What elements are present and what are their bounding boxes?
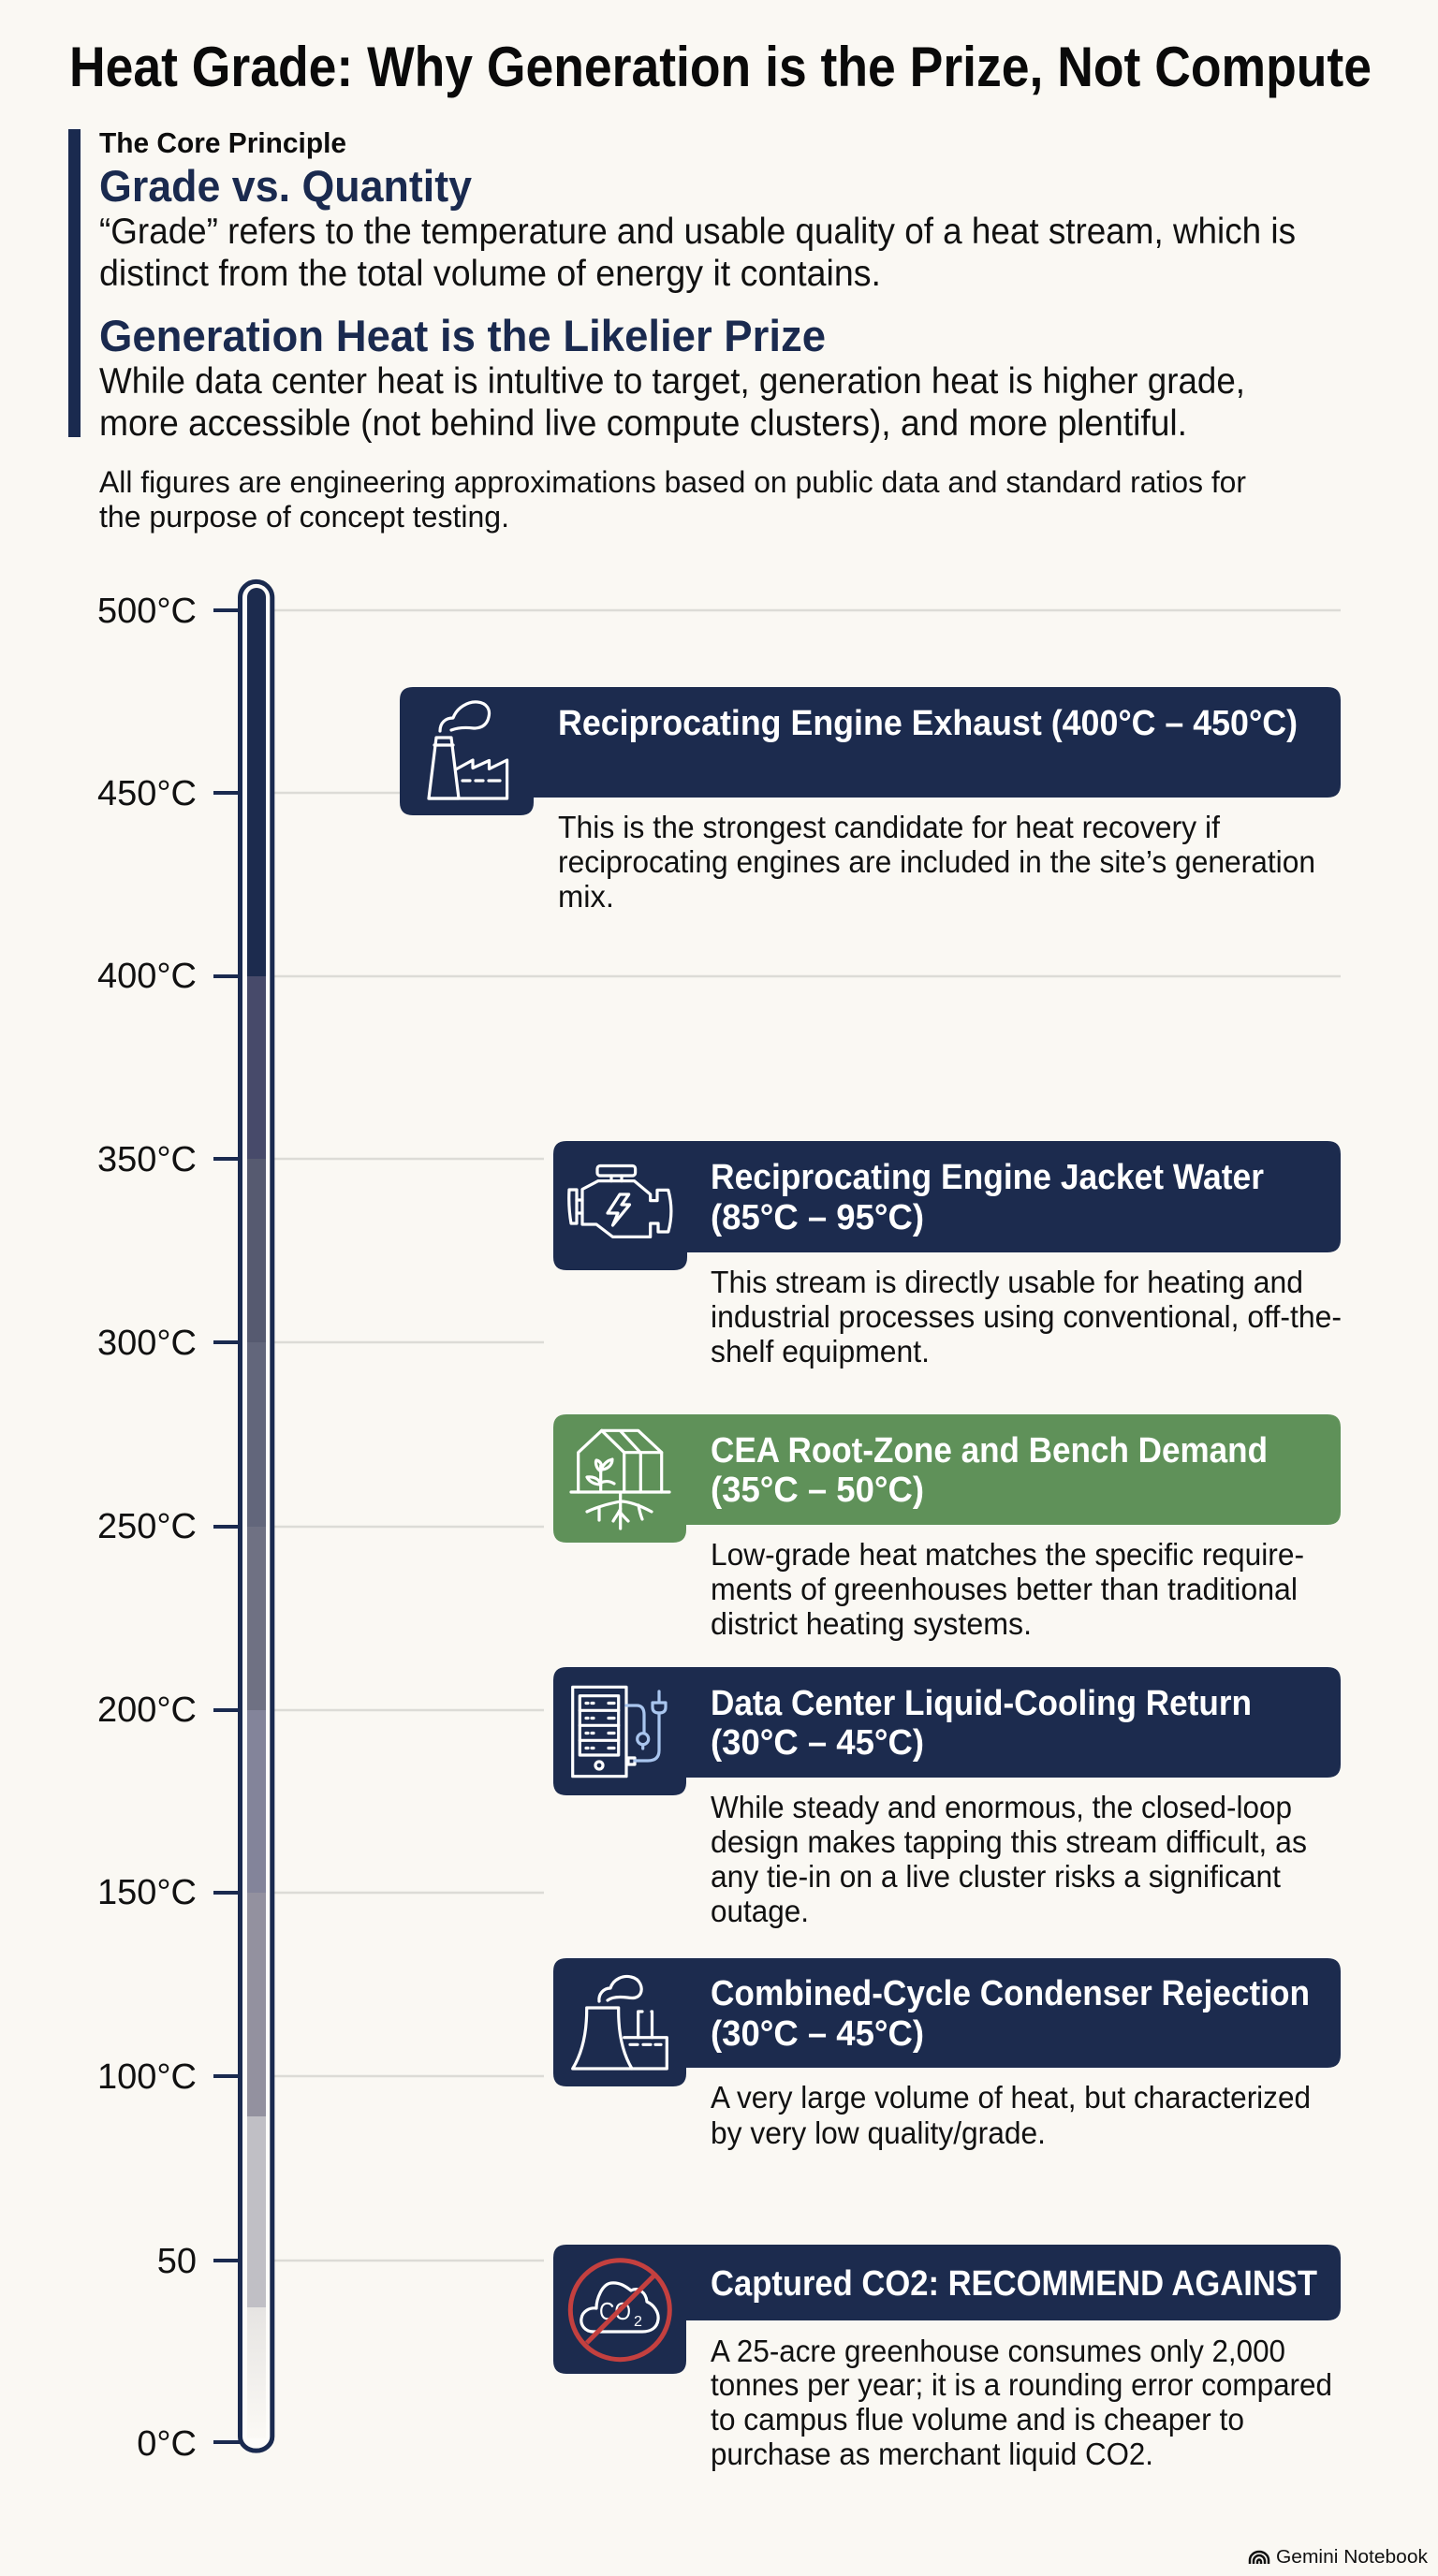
card text xyxy=(711,2334,1332,2471)
card title: Combined-Cycle Condenser Rejection xyxy=(711,1974,1310,2013)
card header xyxy=(553,1958,1341,2086)
text: grade definition: “Grade” refers to the temperature and usable quality of a heat stream, which is xyxy=(99,212,1296,252)
panel: CEA root-zone and bench demand xyxy=(553,1414,1341,1641)
card title: (85°C – 95°C) xyxy=(711,1198,924,1237)
card title xyxy=(711,1974,1310,2054)
axis ticks xyxy=(213,610,240,2442)
axis labels: 100°C xyxy=(97,2057,197,2097)
icon: crossed-out CO2 cloud: CO xyxy=(599,2297,631,2325)
card title: (30°C – 45°C) xyxy=(711,1723,924,1763)
card header xyxy=(553,1141,1341,1270)
text: generation heat explanation xyxy=(99,361,1245,444)
card title xyxy=(711,1684,1252,1763)
card text: Low-grade heat matches the specific require- xyxy=(711,1537,1304,1572)
icon: greenhouse with roots xyxy=(571,1430,669,1529)
text: grade definition: distinct from the total volume of energy it contains. xyxy=(99,254,881,294)
card title: (30°C – 45°C) xyxy=(711,2014,924,2054)
card title: Data Center Liquid-Cooling Return xyxy=(711,1684,1252,1723)
heading: generation heat: Generation Heat is the Likelier Prize xyxy=(99,311,826,360)
card text: While steady and enormous, the closed-loop xyxy=(711,1790,1292,1824)
icon: crossed-out CO2 cloud xyxy=(570,2261,669,2360)
axis labels: 0°C xyxy=(137,2424,197,2464)
chart: thermometer temperature scale xyxy=(97,581,272,2464)
accent bar xyxy=(68,129,81,437)
heading: grade vs quantity: Grade vs. Quantity xyxy=(99,161,472,211)
note: approximations disclaimer: All figures are engineering approximations based on public data and standard ratios for xyxy=(99,465,1246,499)
card text xyxy=(711,1790,1307,1928)
card text: A very large volume of heat, but characterized xyxy=(711,2080,1311,2115)
axis labels: 350°C xyxy=(97,1140,197,1179)
card text: district heating systems. xyxy=(711,1606,1032,1641)
card title: Reciprocating Engine Exhaust (400°C – 450°C) xyxy=(558,704,1298,743)
card text: This is the strongest candidate for heat recovery if xyxy=(558,810,1221,844)
card text xyxy=(711,2080,1311,2150)
axis labels: 50 xyxy=(157,2242,197,2281)
text: grade definition xyxy=(99,212,1296,294)
axis labels: 450°C xyxy=(97,774,197,813)
axis labels: 400°C xyxy=(97,957,197,996)
card title: Reciprocating Engine Jacket Water xyxy=(711,1158,1264,1197)
card text: reciprocating engines are included in the site’s generation xyxy=(558,844,1315,879)
card text: by very low quality/grade. xyxy=(711,2115,1046,2150)
panel: reciprocating engine jacket water xyxy=(553,1141,1342,1368)
axis labels xyxy=(97,592,197,2464)
note: approximations disclaimer xyxy=(99,465,1246,534)
icon: crossed-out CO2 cloud: 2 xyxy=(634,2314,642,2330)
card header xyxy=(553,1667,1341,1795)
card text xyxy=(711,1537,1304,1641)
card text: ments of greenhouses better than traditional xyxy=(711,1572,1298,1606)
axis labels: 300°C xyxy=(97,1324,197,1363)
icon: factory xyxy=(429,702,507,798)
text: generation heat explanation: more accessible (not behind live compute clusters), and more plentiful. xyxy=(99,403,1187,444)
watermark: gemini notebook: Gemini Notebook xyxy=(1276,2547,1429,2568)
card text: any tie-in on a live cluster risks a significant xyxy=(711,1859,1281,1894)
card text xyxy=(558,810,1315,914)
card text: industrial processes using conventional, off-the- xyxy=(711,1299,1342,1334)
thermometer tube xyxy=(240,581,272,2451)
card title xyxy=(711,1158,1264,1237)
card text: A 25-acre greenhouse consumes only 2,000 xyxy=(711,2334,1285,2368)
axis labels: 150°C xyxy=(97,1873,197,1912)
card text: purchase as merchant liquid CO2. xyxy=(711,2437,1153,2471)
card text xyxy=(711,1265,1342,1368)
card header xyxy=(400,687,1341,815)
axis labels: 500°C xyxy=(97,592,197,631)
card text: outage. xyxy=(711,1894,809,1928)
icon: cooling tower xyxy=(573,1977,667,2069)
axis labels: 200°C xyxy=(97,1690,197,1730)
eyebrow: the core principle: The Core Principle xyxy=(99,126,346,159)
card header xyxy=(553,1414,1341,1543)
panel: core principle xyxy=(68,126,1296,444)
panel: reciprocating engine exhaust xyxy=(400,687,1341,914)
card title: (35°C – 50°C) xyxy=(711,1471,924,1510)
card text: This stream is directly usable for heating and xyxy=(711,1265,1303,1299)
card text: design makes tapping this stream difficult, as xyxy=(711,1824,1307,1859)
card header xyxy=(553,2245,1341,2374)
panel: data center liquid-cooling return xyxy=(553,1667,1341,1928)
card title: CEA Root-Zone and Bench Demand xyxy=(711,1431,1268,1471)
note: approximations disclaimer: the purpose of concept testing. xyxy=(99,500,509,534)
card text: tonnes per year; it is a rounding error compared xyxy=(711,2367,1332,2402)
card title: Captured CO2: RECOMMEND AGAINST xyxy=(711,2264,1317,2304)
panel: combined-cycle condenser rejection xyxy=(553,1958,1341,2150)
panel: captured CO2 recommend against xyxy=(553,2245,1341,2471)
icon: engine xyxy=(569,1166,671,1237)
text: generation heat explanation: While data center heat is intultive to target, generation heat is higher grade, xyxy=(99,361,1245,402)
axis labels: 250°C xyxy=(97,1507,197,1546)
icon: server with cooling loop xyxy=(573,1687,666,1777)
card text: to campus flue volume and is cheaper to xyxy=(711,2402,1244,2437)
card title xyxy=(711,1431,1268,1510)
icon: notebook logo xyxy=(1250,2552,1269,2564)
card text: mix. xyxy=(558,879,614,914)
card text: shelf equipment. xyxy=(711,1334,930,1368)
